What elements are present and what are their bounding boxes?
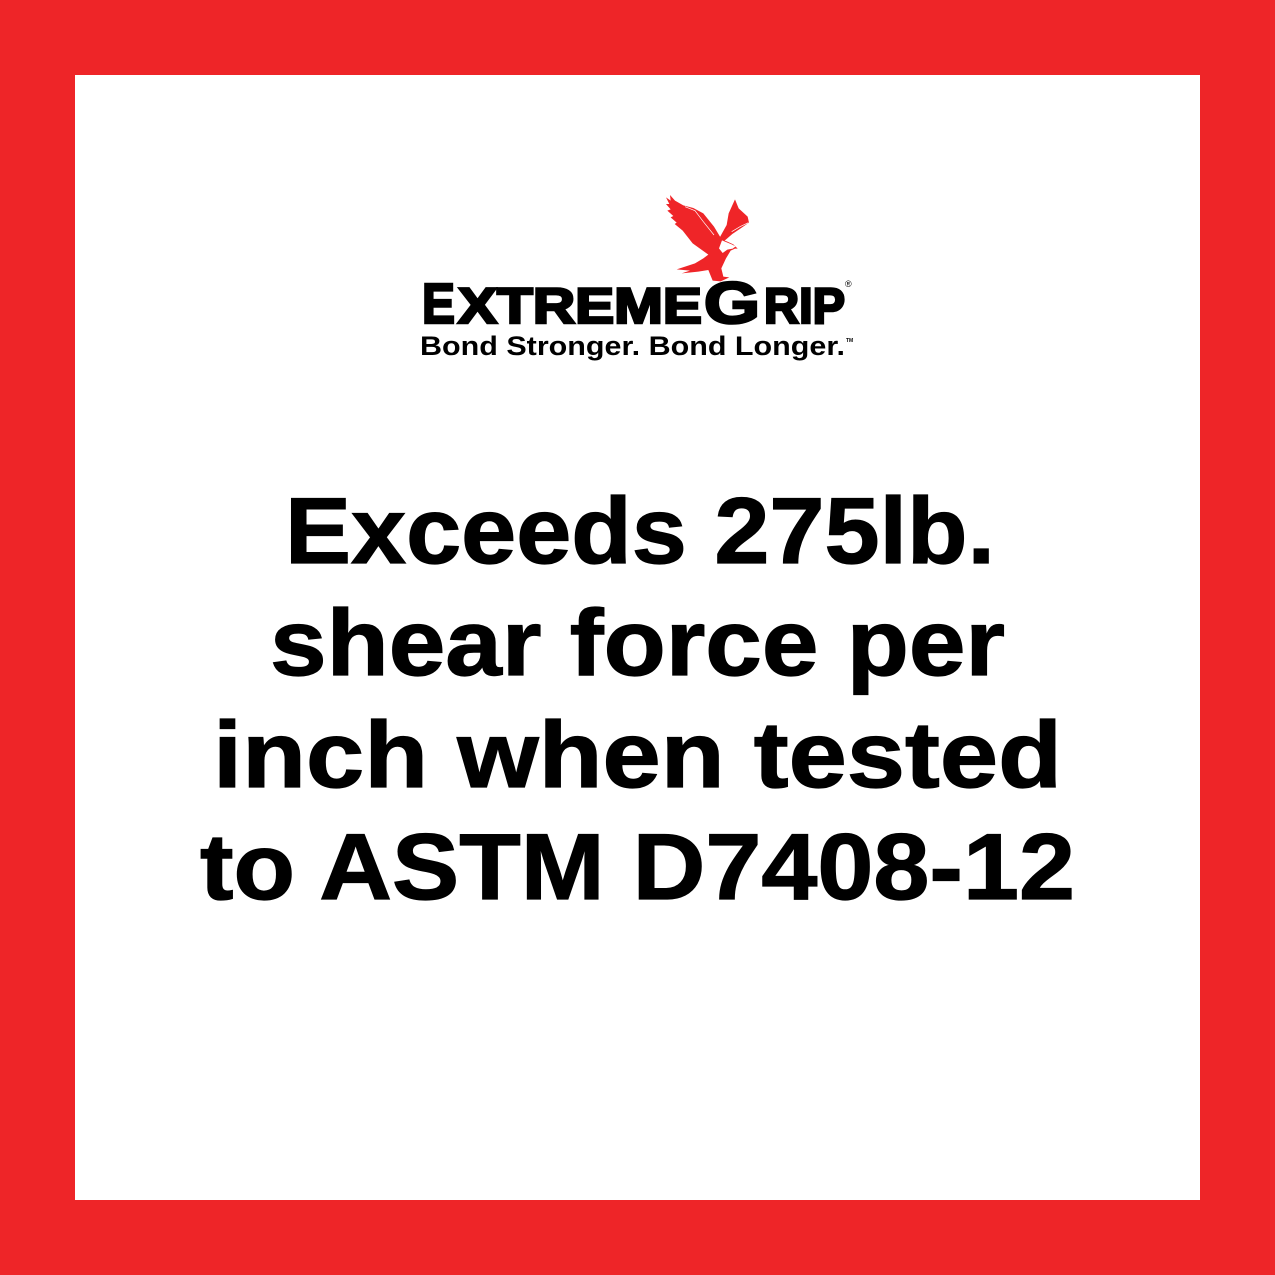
logo: ExtremeGrip [420,195,853,361]
main statement heading: to ASTM D7408-12 [200,814,1075,919]
icon: red eagle [666,195,749,281]
logo wordmark: RIP [764,278,845,334]
registered mark: ® [845,279,852,289]
main statement heading: Exceeds 275lb. [285,478,995,583]
trademark mark: TM [846,338,853,344]
logo wordmark [422,271,845,336]
logo wordmark: E [422,272,455,336]
main statement heading [200,478,1075,919]
main statement heading: inch when tested [213,702,1062,807]
logo wordmark: G [704,271,760,336]
logo wordmark: XTREME [458,278,702,334]
main statement heading: shear force per [270,590,1005,695]
logo tagline: Bond Stronger. Bond Longer. [420,331,845,361]
